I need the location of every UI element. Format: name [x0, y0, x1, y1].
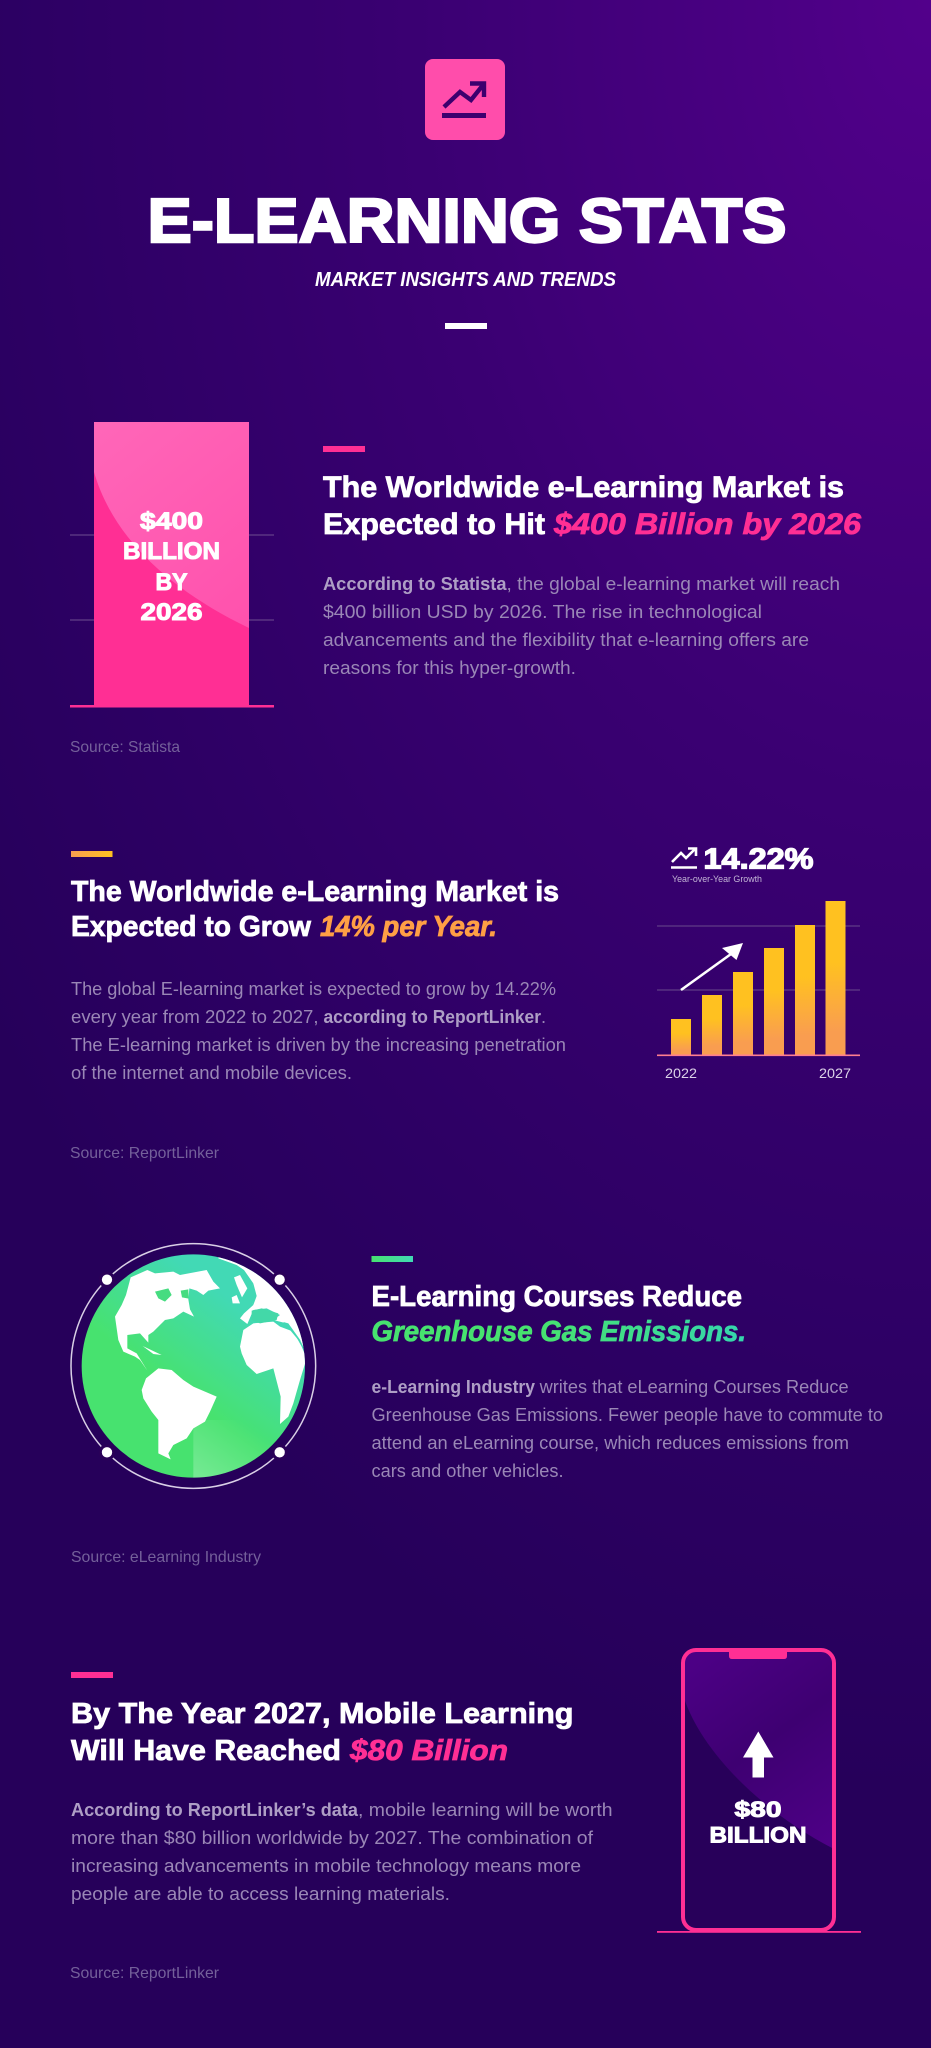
icon: phone — [657, 1650, 861, 1933]
body text: writes that eLearning Courses Reduce — [539, 1376, 849, 1397]
icon: trend line — [671, 848, 697, 868]
heading: Expected to Grow — [71, 911, 311, 943]
heading: By The Year 2027, Mobile Learning — [71, 1698, 574, 1730]
body text: e-Learning Industry — [372, 1376, 536, 1397]
body text: advancements and the flexibility that e-learning offers are — [323, 629, 809, 650]
chart: pink column — [70, 422, 274, 708]
heading: Will Have Reached — [71, 1735, 341, 1767]
chart: pink column: BY — [156, 569, 188, 596]
source: Source: ReportLinker — [70, 1965, 220, 1982]
body text: every year from 2022 to 2027, — [71, 1006, 318, 1027]
subtitle: MARKET INSIGHTS AND TRENDS — [315, 269, 617, 291]
heading: Expected to Hit — [323, 508, 545, 541]
body text: more than $80 billion worldwide by 2027. The combination of — [71, 1827, 594, 1848]
chart: year-over-year growth — [657, 844, 860, 1081]
heading — [71, 1698, 574, 1767]
heading: 14% per Year. — [320, 911, 497, 943]
panel: 400 billion market — [70, 422, 861, 756]
body text: According to ReportLinker’s data — [71, 1799, 359, 1820]
icon: up arrow — [743, 1732, 774, 1778]
heading: Greenhouse Gas Emissions. — [372, 1316, 746, 1348]
body text: , mobile learning will be worth — [358, 1799, 613, 1820]
heading: The Worldwide e-Learning Market is — [71, 876, 559, 908]
accent dash — [71, 1672, 113, 1678]
body text: increasing advancements in mobile technology means more — [71, 1855, 581, 1876]
body text: attend an eLearning course, which reduces emissions from — [372, 1432, 849, 1453]
body text: The global E-learning market is expected to grow by 14.22% — [71, 978, 556, 999]
accent dash — [372, 1256, 413, 1262]
icon: trending chart badge — [425, 59, 505, 140]
body text: . — [541, 1006, 546, 1027]
accent dash — [71, 851, 112, 857]
title: E-LEARNING STATS — [148, 187, 786, 256]
phone label: BILLION — [710, 1822, 806, 1848]
axis labels: 2027 — [819, 1066, 851, 1081]
arrow — [681, 943, 743, 990]
bars — [671, 901, 846, 1055]
title divider — [445, 323, 487, 329]
source: Source: eLearning Industry — [71, 1549, 261, 1566]
panel: greenhouse gas — [71, 1244, 883, 1566]
chart: pink column: $400 — [140, 508, 203, 535]
phone label: $80 — [734, 1797, 782, 1822]
panel: mobile learning — [70, 1650, 861, 1982]
body text: people are able to access learning materials. — [71, 1883, 450, 1904]
heading — [71, 876, 559, 943]
phone label — [710, 1797, 806, 1848]
growth caption: Year-over-Year Growth — [672, 874, 762, 885]
body text: Greenhouse Gas Emissions. Fewer people have to commute to — [372, 1404, 883, 1425]
chart: pink column: 2026 — [140, 599, 202, 626]
panel: 14% growth — [70, 844, 860, 1162]
body text: reasons for this hyper-growth. — [323, 657, 576, 678]
body text: $400 billion USD by 2026. The rise in technological — [323, 601, 762, 622]
chart: pink column: BILLION — [123, 538, 220, 565]
source: Source: Statista — [70, 739, 180, 756]
body text — [323, 573, 840, 678]
accent dash — [323, 446, 365, 452]
body text: , the global e-learning market will reach — [506, 573, 840, 594]
heading — [323, 471, 861, 541]
body text — [71, 1799, 613, 1904]
icon: globe — [71, 1244, 316, 1488]
axis labels — [665, 1066, 851, 1081]
source: Source: ReportLinker — [70, 1145, 220, 1162]
heading: $80 Billion — [349, 1735, 508, 1767]
body text: According to Statista — [323, 573, 507, 594]
body text: according to ReportLinker — [324, 1006, 541, 1027]
heading: E-Learning Courses Reduce — [372, 1281, 742, 1313]
body text: cars and other vehicles. — [372, 1460, 564, 1481]
body text: of the internet and mobile devices. — [71, 1062, 352, 1083]
heading: $400 Billion by 2026 — [553, 508, 861, 541]
axis labels: 2022 — [665, 1066, 697, 1081]
heading: The Worldwide e-Learning Market is — [323, 471, 844, 504]
body text — [71, 978, 566, 1083]
body text — [372, 1376, 883, 1481]
heading — [372, 1281, 746, 1348]
growth figure: 14.22% — [704, 844, 814, 876]
body text: The E-learning market is driven by the increasing penetration — [71, 1034, 566, 1055]
